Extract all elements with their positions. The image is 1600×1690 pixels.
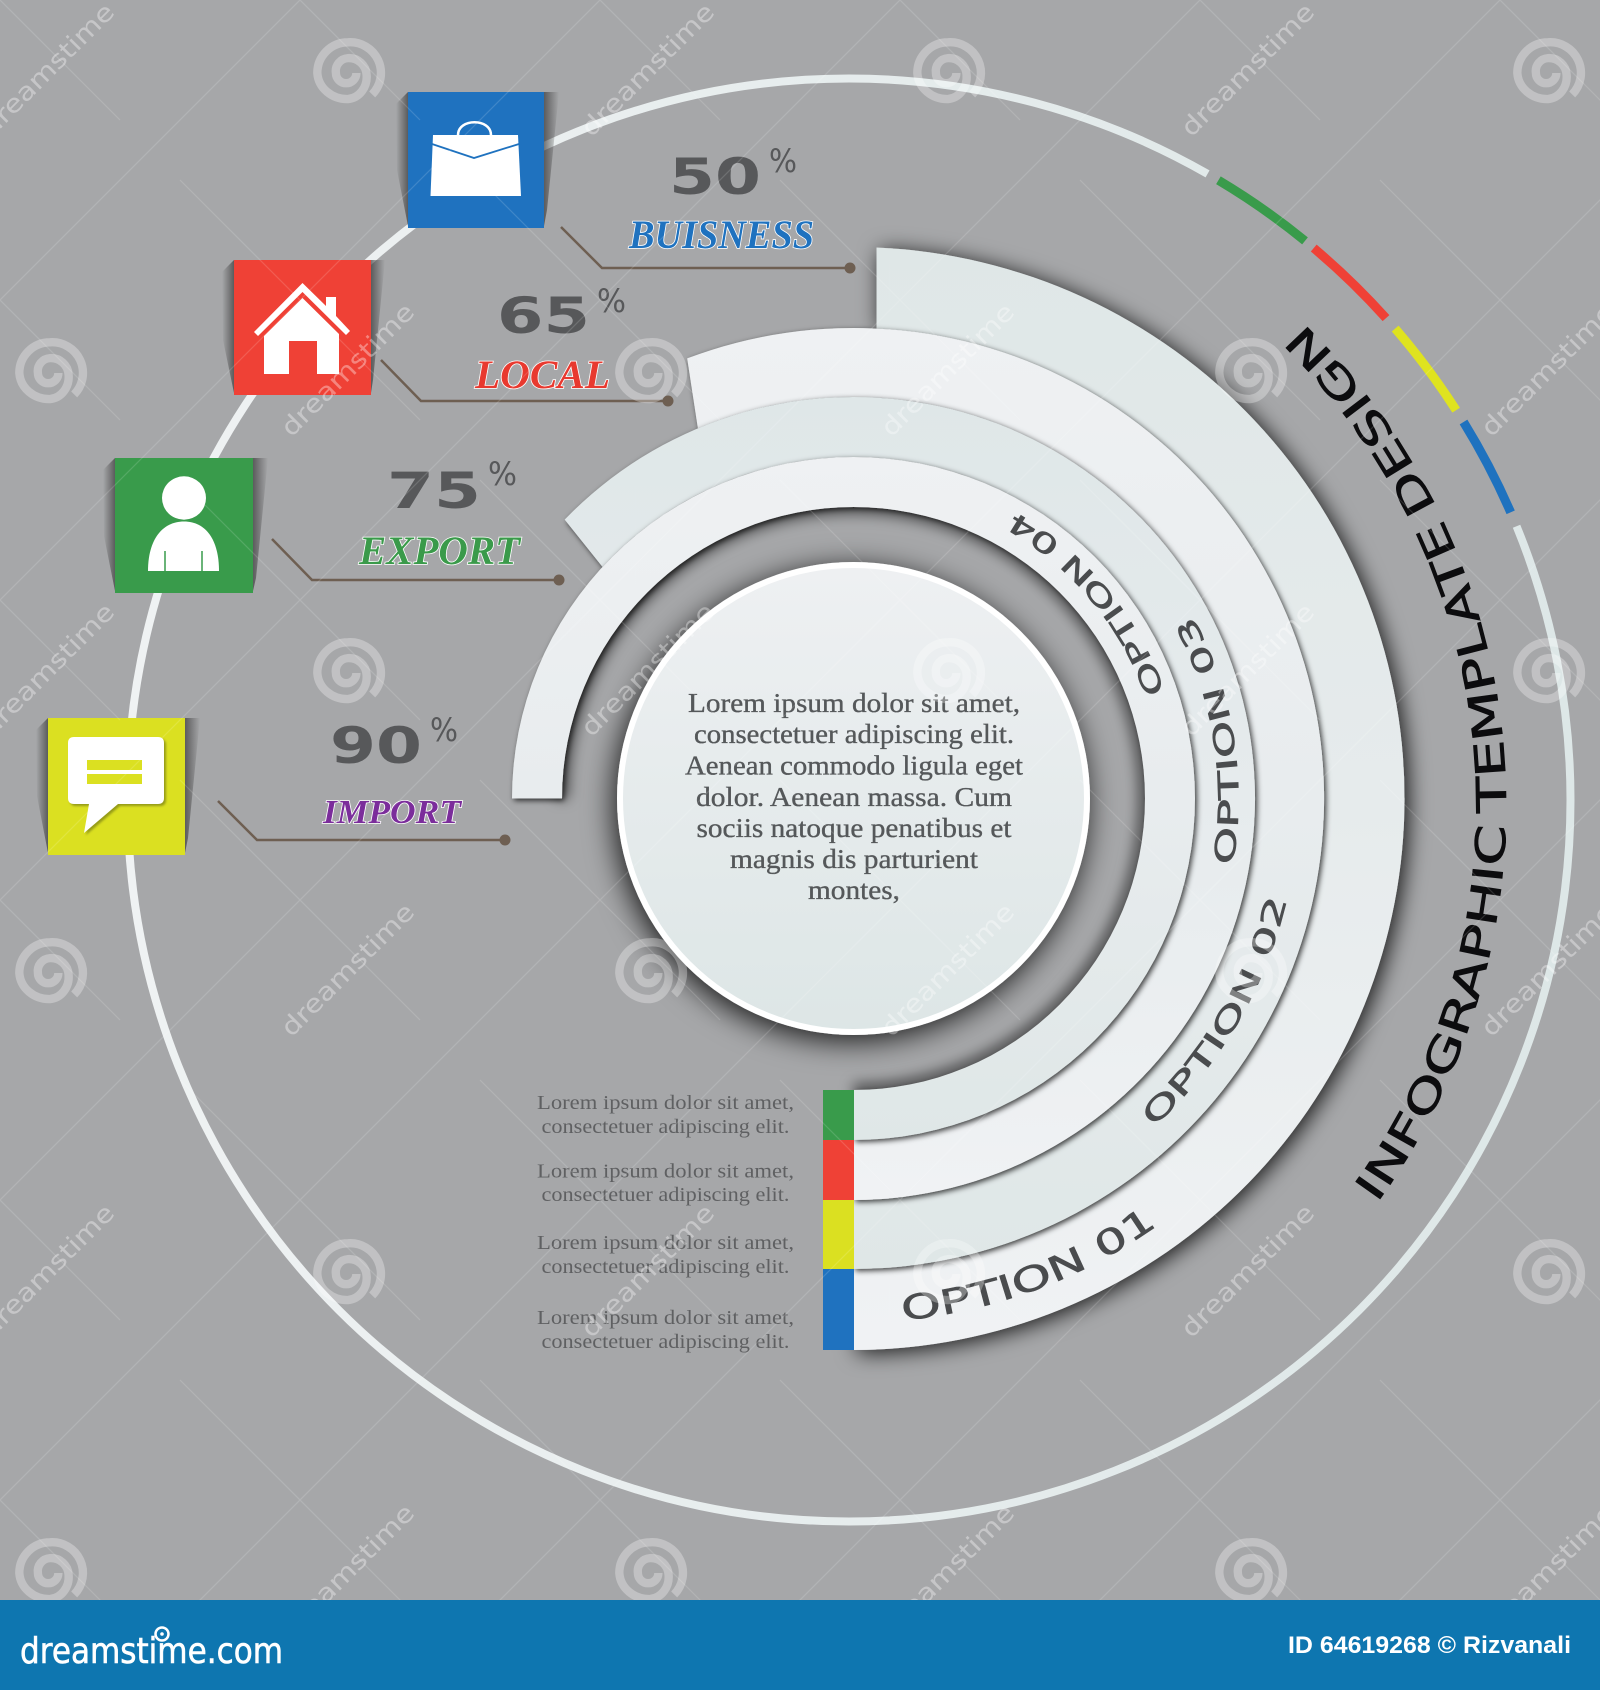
arc: option 04 [512,457,1195,1140]
key text blocks: Lorem ipsum dolor sit amet, [537,1307,794,1329]
watermark overlay: dreamstime [875,897,1020,1042]
key text blocks [537,1092,794,1353]
key text blocks: consectetuer adipiscing elit. [542,1331,790,1353]
arc: option 03 [565,397,1255,1200]
stat: 75% export [272,455,564,586]
option labels on arcs: OPTION 03 [1178,620,1239,862]
stat: 50% business [561,142,856,274]
icon tile: person [103,458,268,593]
footer bar [0,1600,1600,1690]
option labels on arcs: OPTION 04 [1010,514,1161,694]
watermark overlay: dreamstime [875,297,1020,442]
stat: 90% import [218,711,510,846]
stat: 90% import: 90 [330,717,422,775]
stat: 50% business: % [769,142,797,180]
stat: 75% export: EXPORT [358,528,522,573]
footer bar: ID 64619268 © Rizvanali [1288,1632,1571,1659]
watermark overlay: dreamstime [1175,0,1320,142]
footer bar: dreamstime.com [20,1631,283,1672]
stat: 65% local: 65 [497,287,590,345]
option labels on arcs: OPTION 02 [1145,900,1286,1122]
key text blocks: consectetuer adipiscing elit. [542,1184,790,1206]
key text blocks: consectetuer adipiscing elit. [542,1116,790,1138]
watermark overlay: dreamstime [275,297,420,442]
inner edge shadow of option 04 arc [562,507,1145,1090]
option labels on arcs: OPTION 01 [903,1212,1154,1319]
watermark overlay: dreamstime [275,1498,420,1643]
watermark overlay: dreamstime [575,0,720,142]
center text: sociis natoque penatibus et [696,813,1012,843]
watermark overlay: dreamstime [275,897,420,1042]
center text: magnis dis parturient [730,844,979,874]
watermark overlay: dreamstime [1475,1498,1600,1643]
stat: 65% local: LOCAL [474,352,610,397]
stat: 75% export: % [488,455,517,493]
key text blocks: Lorem ipsum dolor sit amet, [537,1232,794,1254]
stat: 50% business: BUISNESS [628,212,814,257]
key text blocks: consectetuer adipiscing elit. [542,1256,790,1278]
stat: 75% export: 75 [387,462,481,520]
option labels on arcs [903,514,1286,1319]
key text blocks: Lorem ipsum dolor sit amet, [537,1160,794,1182]
center text: Lorem ipsum dolor sit amet, [688,688,1020,718]
key text blocks: Lorem ipsum dolor sit amet, [537,1092,794,1114]
stat: 90% import: IMPORT [322,794,462,831]
watermark overlay: dreamstime [575,597,720,742]
center text [685,688,1024,905]
watermark overlay: dreamstime [575,1198,720,1343]
watermark overlay: dreamstime [1175,597,1320,742]
icon tile: house [222,260,385,395]
stat: 65% local [381,282,674,406]
center text: dolor. Aenean massa. Cum [696,782,1012,812]
outer ring [128,78,1570,1522]
watermark overlay: dreamstime [1475,297,1600,442]
center text: montes, [808,875,900,905]
center text: consectetuer adipiscing elit. [694,719,1014,749]
stat: 65% local: % [597,282,626,320]
color key bars [823,1090,854,1350]
curved title: INFOGRAPHIC TEMPLATE DESIGN [1286,326,1506,1200]
stat: 50% business: 50 [669,148,761,206]
center circle [620,565,1087,1032]
stat: 90% import: % [430,711,458,749]
icon tile: briefcase [396,92,559,228]
watermark overlay: dreamstime [875,1498,1020,1643]
arc: option 01 [854,248,1405,1350]
watermark overlay: dreamstime [1175,1198,1320,1343]
center text: Aenean commodo ligula eget [685,750,1024,780]
arc: option 02 [687,328,1324,1269]
watermark overlay: dreamstime [1475,897,1600,1042]
icon tile: chat bubble [36,718,200,855]
